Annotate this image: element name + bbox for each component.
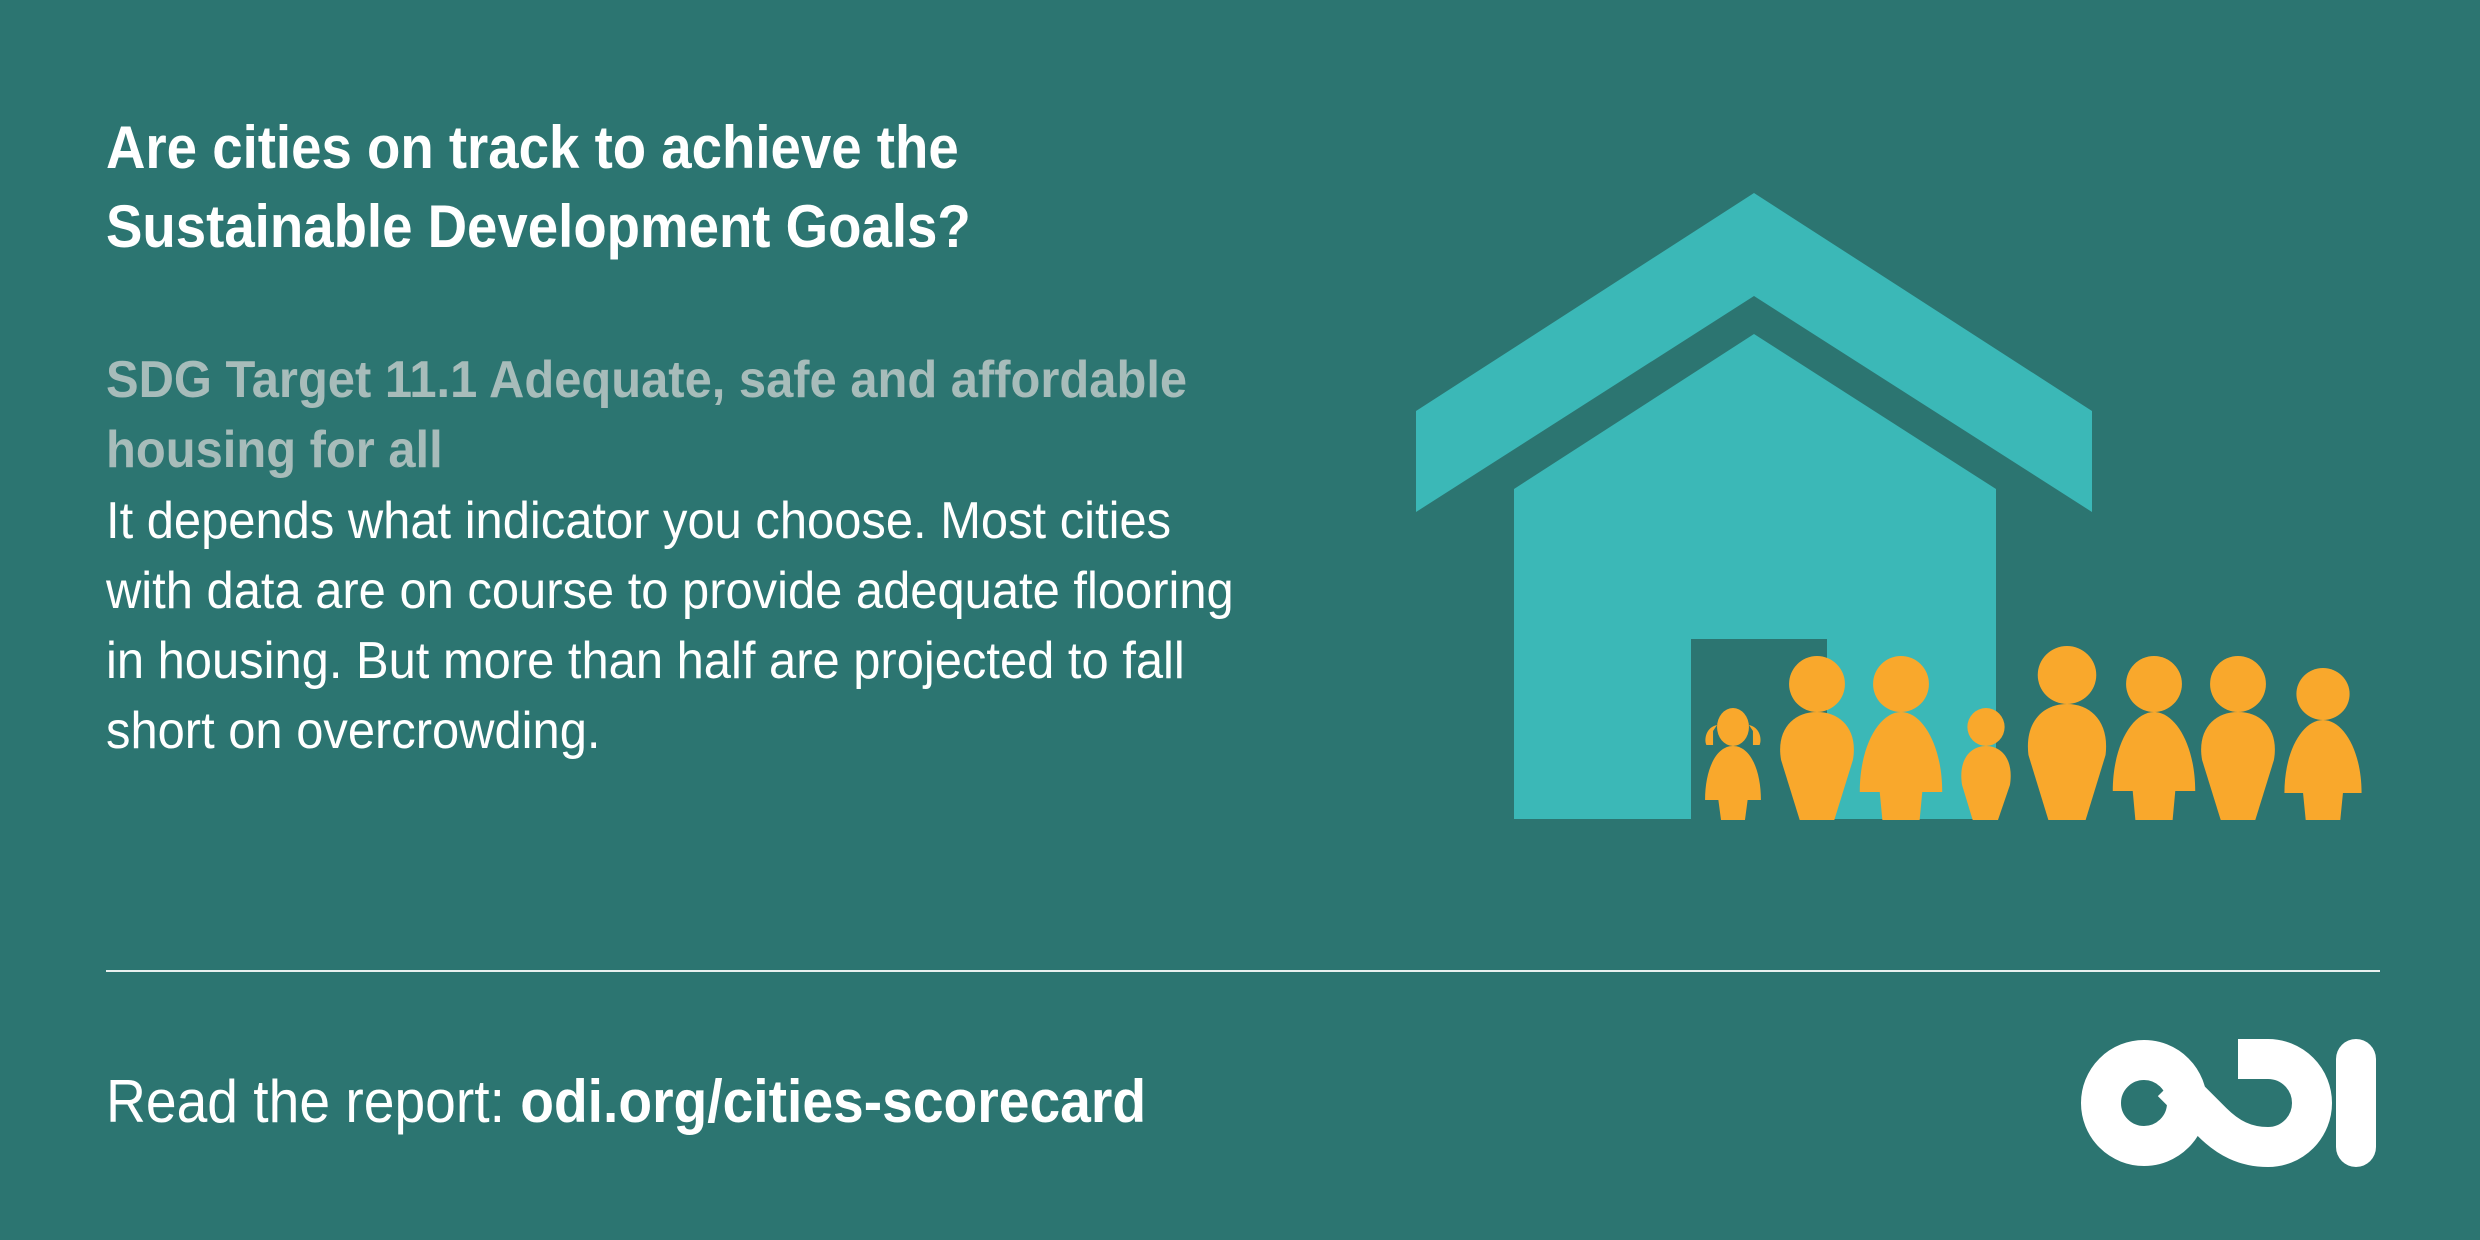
body text: with data are on course to provide adequate flooring [106, 562, 1234, 620]
icon: roof [1416, 193, 2092, 512]
body text [106, 492, 1234, 760]
subtitle: SDG target: housing for all [106, 421, 443, 479]
icon: people [1705, 646, 2362, 820]
title: Sustainable Development Goals? [106, 193, 971, 260]
title: Are cities on track to achieve the [106, 114, 959, 181]
subtitle: SDG target [106, 351, 1187, 479]
icon: house body [1514, 334, 1996, 820]
subtitle: SDG target: SDG Target 11.1 Adequate, safe and affordable [106, 351, 1187, 409]
body text: short on overcrowding. [106, 702, 600, 760]
divider [106, 970, 2380, 972]
body text: in housing. But more than half are projected to fall [106, 632, 1185, 690]
title [106, 114, 971, 260]
body text: It depends what indicator you choose. Most cities [106, 492, 1171, 550]
footer: report link: Read the report: odi.org/cities-scorecard [106, 1068, 1146, 1135]
